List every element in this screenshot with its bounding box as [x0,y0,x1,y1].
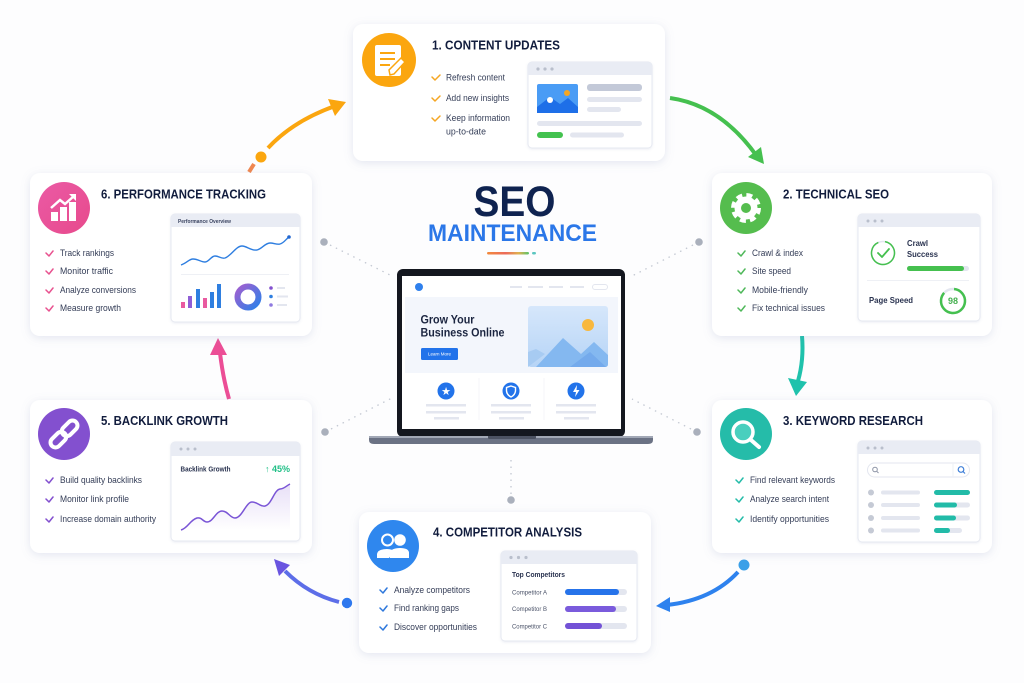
checklist: Mobile-friendly [752,285,808,295]
heading: 5. BACKLINK GROWTH [101,413,228,428]
checklist: Refresh content [446,72,505,82]
checklist: Crawl & index [752,248,803,258]
browser mockup: backlink chart [171,442,300,541]
heading: 6. PERFORMANCE TRACKING [101,186,266,202]
hero section: Business Online [420,328,504,340]
feature columns: ★ [441,386,451,398]
icon: rising bars [38,182,90,234]
laptop [369,269,653,444]
browser mockup: crawl and page speed: Crawl [907,238,928,248]
checklist: Add new insights [446,93,509,103]
subtitle: maintenance: MAINTENANCE [428,220,597,247]
checklist: Analyze competitors [394,585,470,595]
site navigation [415,283,608,291]
hero section: Grow Your [420,314,475,326]
checklist: up-to-date [446,126,486,136]
dotted connectors [320,238,703,504]
checklist: Site speed [752,266,791,276]
checklist: Increase domain authority [60,514,156,524]
checklist: Analyze search intent [750,494,829,504]
browser mockup: crawl and page speed: Success [907,249,938,259]
checklist: Fix technical issues [752,303,825,313]
icon: document and pencil [362,33,416,87]
checklist: Identify opportunities [750,514,829,524]
icon: gear [720,182,772,234]
checklist: Build quality backlinks [60,475,142,485]
checklist [738,248,825,313]
checklist [46,475,156,524]
hero section: Learn More [428,352,451,357]
browser mockup [528,62,652,148]
arrow: keyword research to competitor analysis [656,560,750,612]
checklist: Track rankings [60,248,114,258]
title underline [487,252,536,254]
panel: 1 content updates [353,24,665,161]
browser mockup: keyword table [858,441,980,542]
checklist: Monitor traffic [60,266,113,276]
browser mockup: backlink chart: ↑ 45% [265,464,290,474]
checklist [46,248,136,313]
browser mockup: top competitors: Top Competitors [512,570,565,579]
browser mockup: top competitors: Competitor B [512,606,547,613]
browser mockup: crawl and page speed [858,214,980,321]
feature columns [426,378,596,420]
arrow: content updates to technical SEO [670,98,764,164]
icon: magnifier [720,408,772,460]
checklist: Discover opportunities [394,622,477,632]
panel: 4 competitor analysis [359,512,651,653]
arrow: competitor analysis to backlink growth [274,559,352,608]
checklist [432,72,510,136]
checklist: Analyze conversions [60,285,136,295]
heading: 1. CONTENT UPDATES [432,38,560,52]
browser mockup: crawl and page speed: Page Speed [869,295,913,305]
icon: chain link [38,408,90,460]
arrow: technical SEO to keyword research [788,336,807,396]
checklist: Find ranking gaps [394,603,459,613]
checklist [380,585,477,632]
arrow: backlink growth to performance tracking [210,338,229,399]
arrow: performance tracking to content updates [249,99,346,172]
browser mockup: top competitors: Competitor C [512,624,547,630]
heading: 3. KEYWORD RESEARCH [783,413,923,428]
browser mockup: top competitors [501,551,637,641]
panel: 6 performance tracking [30,173,312,336]
checklist: Measure growth [60,303,121,313]
panel: 3 keyword research [712,400,992,553]
title: SEO: SEO [474,178,556,226]
browser mockup: crawl and page speed: 98 [948,296,958,306]
heading: 4. COMPETITOR ANALYSIS [433,524,582,540]
checklist: Keep information [446,113,510,123]
hero section [405,297,618,373]
checklist: Find relevant keywords [750,475,835,485]
laptop base [369,436,653,444]
panel: 5 backlink growth [30,400,312,553]
icon: people [367,520,419,572]
panel: 2 technical SEO [712,173,992,336]
browser mockup: performance overview [171,214,300,322]
browser mockup: performance overview: Performance Overview [178,219,232,225]
checklist [736,475,835,524]
browser mockup: top competitors: Competitor A [512,590,548,596]
checklist: Monitor link profile [60,494,129,504]
browser mockup: backlink chart: Backlink Growth [180,464,231,474]
heading: 2. TECHNICAL SEO [783,186,889,202]
